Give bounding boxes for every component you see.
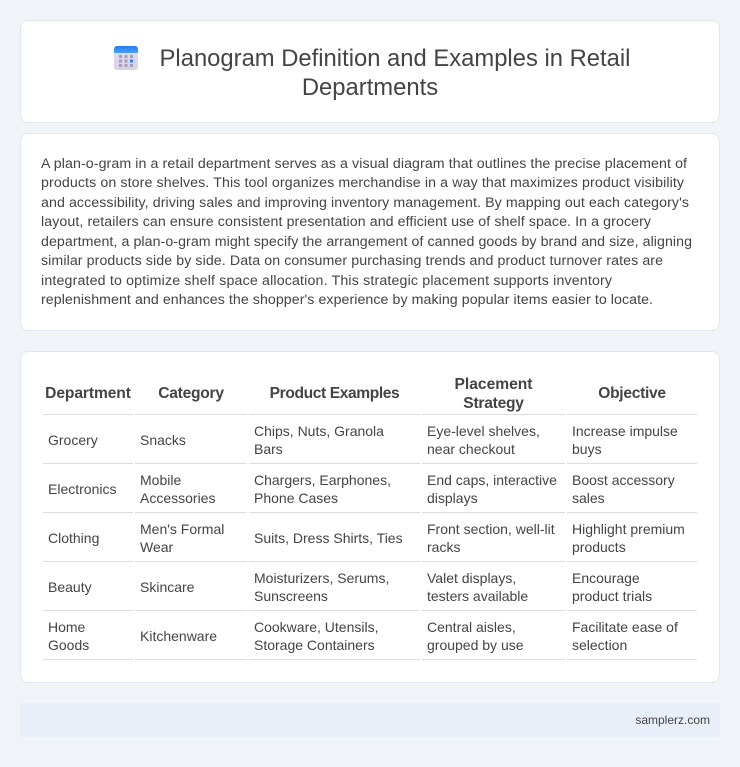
row: Beauty: Beauty xyxy=(48,579,92,595)
table header xyxy=(43,376,697,415)
row: Home Goods: grouped by use xyxy=(427,637,524,653)
row: Home Goods xyxy=(43,619,697,660)
row: Home Goods: Facilitate ease of xyxy=(572,619,678,635)
row: Grocery xyxy=(43,423,697,464)
row: Home Goods: Goods xyxy=(48,637,89,653)
row: Grocery: Snacks xyxy=(140,432,186,448)
row: Beauty: Skincare xyxy=(140,579,194,595)
text block: description paragraph: similar products side by side. Data on consumer purchasing trends and product turnover rates are xyxy=(41,253,663,269)
row: Grocery: Grocery xyxy=(48,432,98,448)
footer bar xyxy=(20,703,720,737)
row: Grocery: Eye-level shelves, xyxy=(427,423,540,439)
row: Clothing: Wear xyxy=(140,539,173,555)
row: Electronics: Chargers, Earphones, xyxy=(254,472,391,488)
footer source text: samplerz.com xyxy=(635,713,710,727)
table header: Strategy xyxy=(463,395,524,412)
row: Clothing: Front section, well-lit xyxy=(427,521,555,537)
table header: Department xyxy=(45,385,131,402)
row: Electronics: Mobile xyxy=(140,472,181,488)
row: Grocery: Chips, Nuts, Granola xyxy=(254,423,384,439)
panel: title card xyxy=(20,20,720,123)
row: Clothing: Clothing xyxy=(48,530,99,546)
row: Clothing: products xyxy=(572,539,626,555)
text block: description paragraph: A plan-o-gram in a retail department serves as a visual diagram that outlines the precise placement of xyxy=(41,156,687,172)
table header: Objective xyxy=(598,385,666,402)
text block: description paragraph: products on store shelves. This tool organizes merchandise in a way that maximizes product visibility xyxy=(41,175,685,191)
row: Electronics: Boost accessory xyxy=(572,472,675,488)
table header: Category xyxy=(158,385,224,402)
table: planogram by department xyxy=(43,376,697,660)
row: Electronics: sales xyxy=(572,490,605,506)
title: Planogram Definition and Examples in Retail xyxy=(160,45,630,72)
row: Home Goods: selection xyxy=(572,637,627,653)
row: Beauty: testers available xyxy=(427,588,528,604)
row: Electronics: Electronics xyxy=(48,481,116,497)
row: Clothing: racks xyxy=(427,539,460,555)
row: Beauty: Sunscreens xyxy=(254,588,328,604)
row: Clothing: Men's Formal xyxy=(140,521,224,537)
panel: table card xyxy=(20,351,720,683)
row: Electronics: Phone Cases xyxy=(254,490,338,506)
row: Beauty: Valet displays, xyxy=(427,570,516,586)
row: Home Goods: Storage Containers xyxy=(254,637,375,653)
row: Clothing xyxy=(43,521,697,562)
table header: Product Examples xyxy=(270,385,399,402)
text block: description paragraph: replenishment and enhances the shopper's experience by making popular items easier to locate. xyxy=(41,292,653,308)
text block: description paragraph: department, a plan-o-gram might specify the arrangement of canned goods by brand and size, aligning xyxy=(41,234,692,250)
row: Clothing: Highlight premium xyxy=(572,521,685,537)
row: Electronics: displays xyxy=(427,490,478,506)
row: Grocery: buys xyxy=(572,441,602,457)
table header: Placement xyxy=(454,376,532,393)
row: Home Goods: Home xyxy=(48,619,85,635)
row: Beauty: product trials xyxy=(572,588,652,604)
row: Beauty xyxy=(43,570,697,611)
text block: description paragraph: layout, retailers can ensure consistent presentation and efficient use of shelf space. In a grocery xyxy=(41,214,652,230)
row: Electronics: Accessories xyxy=(140,490,215,506)
row: Home Goods: Central aisles, xyxy=(427,619,516,635)
row: Electronics: End caps, interactive xyxy=(427,472,557,488)
text block: description paragraph: integrated to optimize shelf space allocation. This strategic placement supports inventory xyxy=(41,273,613,289)
row: Grocery: near checkout xyxy=(427,441,515,457)
text block: description paragraph xyxy=(41,156,692,308)
row: Home Goods: Cookware, Utensils, xyxy=(254,619,378,635)
row: Home Goods: Kitchenware xyxy=(140,628,217,644)
title xyxy=(160,45,630,101)
row: Electronics xyxy=(43,472,697,513)
text block: description paragraph: and accessibility, driving sales and improving inventory management. By mapping out each category's xyxy=(41,195,689,211)
title: Departments xyxy=(302,74,438,101)
panel: description xyxy=(20,133,720,331)
row: Beauty: Encourage xyxy=(572,570,640,586)
icon: calendar grid xyxy=(114,46,138,70)
row: Grocery: Increase impulse xyxy=(572,423,678,439)
row: Clothing: Suits, Dress Shirts, Ties xyxy=(254,530,403,546)
row: Beauty: Moisturizers, Serums, xyxy=(254,570,389,586)
row: Grocery: Bars xyxy=(254,441,283,457)
